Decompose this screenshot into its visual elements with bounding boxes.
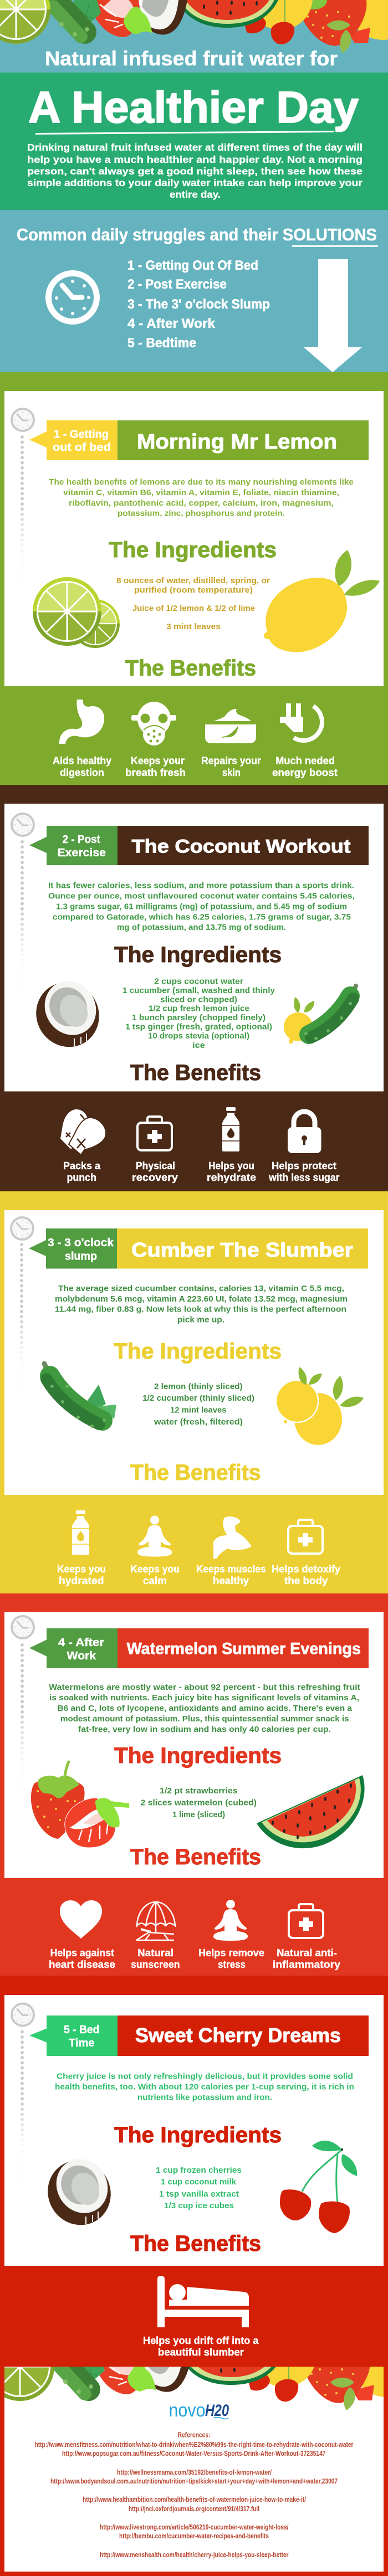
- icon: cherries: [280, 2141, 357, 2233]
- ingredient list: 1 lime (sliced): [172, 1810, 225, 1819]
- banner tab: [29, 1628, 118, 1668]
- description paragraph: fat-free, very low in sodium and has only 40 calories per cup.: [78, 1725, 331, 1734]
- panel: references card: [4, 2367, 384, 2572]
- intro paragraph: entire day.: [170, 189, 221, 200]
- list of struggles: [127, 258, 270, 351]
- logo: novoH20: novo: [169, 2400, 205, 2421]
- intro paragraph: Drinking natural fruit infused water at different times of the day will: [27, 142, 363, 153]
- ingredient list: 1 cup coconut milk: [161, 2177, 237, 2187]
- description paragraph: mg of potassium, and 13.75 mg of sodium.: [117, 923, 286, 932]
- panel: section 3 white card: [4, 1210, 384, 1495]
- description paragraph: [49, 1683, 360, 1734]
- description paragraph: The average sized cucumber contains, calories 13, vitamin C 5.5 mcg,: [58, 1284, 344, 1293]
- panel: section 2 white card: [4, 804, 384, 1091]
- description paragraph: modest amount of potassium. Plus, this quintessential summer snack is: [60, 1714, 349, 1724]
- ingredient list: purified (room temperature): [134, 585, 253, 595]
- benefit labels: inflammatory: [273, 1959, 340, 1970]
- ingredient list: [142, 1382, 254, 1427]
- top fruit banner: [0, 0, 388, 53]
- benefit labels: Packs a: [63, 1160, 101, 1171]
- timeline dots: [21, 1643, 24, 1796]
- description paragraph: compared to Gatorade, which has 6.25 calories, 1.75 grams of sugar, 3.75: [53, 912, 351, 922]
- heading: common daily struggles: Common daily struggles and their SOLUTIONS: [17, 225, 377, 244]
- benefit labels: digestion: [60, 767, 104, 778]
- logo: novoH20: H20: [205, 2402, 229, 2420]
- description paragraph: [55, 2072, 354, 2102]
- description paragraph: 1.3 grams sugar, 61 milligrams (mg) of potassium, and 5.45 mg of sodium: [56, 902, 347, 911]
- icon: first aid kit: [137, 1117, 172, 1150]
- benefit labels: Helps protect: [272, 1160, 336, 1171]
- ingredient list: 1/3 cup ice cubes: [164, 2201, 234, 2210]
- heading: ingredients: The Ingredients: [114, 1339, 282, 1364]
- references list: http://jnci.oxfordjournals.org/content/91/4/317.full: [129, 2505, 259, 2513]
- benefit labels: [53, 755, 338, 778]
- description paragraph: 11.44 mg, fiber 0.83 g. Now lets look at why this is the perfect afternoon: [55, 1305, 346, 1314]
- icon: timeline clock: [12, 1616, 34, 1638]
- banner tab: [29, 1228, 117, 1268]
- description paragraph: Cherry juice is not only refreshingly delicious, but it provides some solid: [57, 2072, 353, 2081]
- banner tab: slump: [65, 1250, 97, 1263]
- banner tab: out of bed: [53, 441, 111, 454]
- benefit labels: calm: [143, 1575, 167, 1586]
- icon: lemon and cucumber: [284, 986, 356, 1043]
- references list: http://www.healthambition.com/health-benefits-of-watermelon-juice-how-to-make-it/: [83, 2496, 306, 2503]
- heading: ingredients: The Ingredients: [114, 2123, 282, 2147]
- benefit labels: Much neded: [275, 755, 335, 767]
- description paragraph: [55, 1284, 348, 1325]
- benefit labels: heart disease: [49, 1959, 115, 1970]
- banner tab: Work: [67, 1649, 96, 1662]
- ingredient list: 1/2 cucumber (thinly sliced): [142, 1394, 254, 1403]
- benefit labels: sunscreen: [131, 1959, 180, 1970]
- ingredient list: 2 slices watermelon (cubed): [141, 1798, 257, 1808]
- benefit labels: Helps against: [50, 1947, 114, 1958]
- banner tab: 1 - Getting: [54, 428, 109, 441]
- banner tab: [29, 826, 118, 865]
- description paragraph: [49, 477, 354, 518]
- ingredient list: Juice of 1/2 lemon & 1/2 of lime: [132, 604, 255, 613]
- ingredient list: 2 lemon (thinly sliced): [154, 1382, 243, 1391]
- panel: green title band: [0, 73, 388, 210]
- icon: water bottle: [72, 1510, 89, 1555]
- ingredient list: 1 bunch parsley (chopped finely): [132, 1013, 266, 1022]
- benefit labels: the body: [284, 1575, 328, 1586]
- banner title: Cumber The Slumber: [131, 1238, 353, 1261]
- ingredient list: water (fresh, filtered): [154, 1417, 243, 1427]
- panel: section 5 white card: [4, 1995, 384, 2266]
- description paragraph: health benefits, too. With about 120 calories per 1-cup serving, it is rich in: [55, 2083, 354, 2091]
- ingredient list: 2 cups coconut water: [154, 977, 243, 986]
- benefit labels: skin: [222, 767, 241, 778]
- heading: benefits: The Benefits: [130, 1061, 261, 1085]
- heading: benefits: The Benefits: [125, 656, 256, 680]
- intro paragraph: [27, 142, 363, 200]
- list of struggles: 1 - Getting Out Of Bed: [127, 258, 258, 273]
- intro paragraph: simple additions to your daily water intake can help improve your: [27, 177, 363, 188]
- icon: first aid kit: [288, 1520, 323, 1554]
- main title: A Healthier Day: [28, 83, 359, 132]
- benefit labels: recovery: [132, 1172, 178, 1183]
- description paragraph: [48, 881, 355, 932]
- heading: benefits: The Benefits: [130, 1461, 261, 1485]
- description paragraph: Ounce per ounce, most unflavoured coconut water contains 5.45 calories,: [48, 892, 355, 901]
- list of struggles: 5 - Bedtime: [127, 336, 196, 351]
- banner tab: 3 - 3 o'clock: [48, 1236, 114, 1249]
- panel: section 1 white card: [4, 391, 384, 686]
- icon: timeline clock: [12, 814, 34, 836]
- icon: power plug: [280, 703, 322, 741]
- benefits row: section 4: [49, 1900, 340, 1970]
- references list: http://www.livestrong.com/article/506219-cucumber-water-weight-loss/: [100, 2523, 289, 2531]
- ingredient list: [116, 576, 270, 631]
- timeline dots: [21, 2030, 24, 2183]
- benefit label: [143, 2335, 259, 2358]
- benefit labels: Repairs your: [201, 755, 261, 767]
- icon: cucumber and mint: [44, 1364, 116, 1428]
- icon: timeline clock: [11, 1217, 33, 1240]
- description paragraph: vitamin C, vitamin B6, vitamin A, vitamin E, foliate, niacin thiamine,: [63, 488, 339, 497]
- icon: water bottle: [222, 1107, 239, 1151]
- description paragraph: riboflavin, pantothenic acid, copper, calcium, iron, magnesium,: [69, 498, 334, 508]
- description paragraph: potassium, zinc, phosphorus and protein.: [118, 508, 285, 518]
- description paragraph: molybdenum 5.6 mcg, vitamin A 223.60 UI, folate 13.52 mcg, magnesium: [55, 1294, 348, 1304]
- heading: ingredients: The Ingredients: [114, 1744, 282, 1768]
- banner tab: 2 - Post: [62, 833, 100, 846]
- banner title: Morning Mr Lemon: [137, 430, 337, 454]
- icon: timeline clock: [12, 409, 34, 431]
- ingredient list: [156, 2166, 242, 2210]
- description paragraph: The health benefits of lemons are due to its many nourishing elements like: [49, 477, 354, 487]
- benefit labels: Keeps your: [131, 755, 185, 767]
- icon: timeline clock: [12, 2004, 34, 2026]
- icon: skin cream: [205, 709, 256, 743]
- icon: coconut: [36, 2149, 122, 2236]
- references list: [34, 2431, 354, 2559]
- icon: meditating figure: [213, 1900, 248, 1941]
- icon: coconut: [24, 971, 111, 1058]
- icon: beach umbrella: [136, 1902, 175, 1940]
- benefit labels: Helps remove: [198, 1947, 264, 1958]
- benefit labels: Natural: [137, 1947, 173, 1958]
- banner tab: [29, 2015, 118, 2056]
- benefits row: section 5: [143, 2276, 259, 2358]
- banner title: [118, 1628, 369, 1668]
- banner title: [117, 1228, 368, 1268]
- description paragraph: nutrients like potassium and iron.: [137, 2092, 272, 2102]
- list of struggles: 3 - The 3' o'clock Slump: [127, 297, 270, 312]
- icon: lime slices: [33, 577, 120, 648]
- heading: benefits: The Benefits: [130, 1845, 261, 1869]
- benefit labels: Keeps muscles: [196, 1564, 266, 1575]
- ingredient list: 1/2 pt strawberries: [160, 1786, 238, 1796]
- icon: meditating figure: [137, 1515, 172, 1556]
- description paragraph: It has fewer calories, less sodium, and more potassium than a sports drink.: [48, 881, 354, 891]
- benefit labels: with less sugar: [268, 1172, 339, 1183]
- ingredient list: 1 tsp vanilla extract: [159, 2189, 239, 2199]
- benefit label: beautiful slumber: [158, 2347, 244, 2358]
- banner tab: 5 - Bed: [64, 2023, 100, 2036]
- benefit labels: energy boost: [272, 767, 338, 778]
- title line: Natural infused fruit water for: Natural infused fruit water for: [45, 47, 338, 70]
- references list: http://bembu.com/cucumber-water-recipes-and-benefits: [119, 2532, 269, 2540]
- ingredient list: 3 mint leaves: [166, 622, 221, 631]
- description paragraph: B6 and C, lots of lycopene, antioxidants and amino acids. There's even a: [58, 1704, 353, 1713]
- benefit labels: breath fresh: [125, 767, 186, 778]
- banner title: [118, 2015, 369, 2056]
- icon: strawberries: [31, 1762, 129, 1848]
- benefit labels: [49, 1947, 340, 1970]
- ingredient list: 12 mint leaves: [170, 1405, 226, 1415]
- ingredient list: 8 ounces of water, distilled, spring, or: [116, 576, 270, 585]
- ingredient list: [141, 1786, 257, 1819]
- benefit labels: punch: [67, 1172, 96, 1183]
- ingredient list: 1 cucumber (small, washed and thinly: [122, 986, 275, 995]
- benefit label: Helps you drift off into a: [143, 2335, 259, 2346]
- references list: http://www.popsugar.com.au/fitness/Coconut-Water-Versus-Sports-Drink-After-Workout-37235147: [62, 2450, 326, 2457]
- benefit labels: Physical: [136, 1160, 175, 1171]
- ingredient list: sliced or chopped): [160, 995, 237, 1005]
- benefit labels: Keeps you: [130, 1564, 180, 1575]
- banner title: Watermelon Summer Evenings: [127, 1640, 361, 1658]
- benefit labels: Natural anti-: [277, 1947, 337, 1958]
- arrow: down: [304, 259, 362, 372]
- benefit labels: Helps you: [208, 1160, 254, 1171]
- benefit labels: stress: [218, 1959, 246, 1970]
- list of struggles: 4 - After Work: [127, 316, 215, 331]
- icon: stomach: [59, 700, 104, 744]
- ingredient list: ice: [192, 1041, 205, 1050]
- banner title: Sweet Cherry Dreams: [135, 2024, 341, 2047]
- banner tab: 4 - After: [58, 1636, 104, 1649]
- bottom fruit banner: [4, 2367, 384, 2410]
- benefits row: section 3: [57, 1510, 340, 1586]
- icon: first aid kit: [289, 1904, 323, 1938]
- references list: http://www.menshealth.com/health/cherry-juice-helps-you-sleep-better: [100, 2551, 289, 2559]
- references list: http://wellnessmama.com/35192/benefits-of-lemon-water/: [117, 2469, 272, 2476]
- timeline dots: [21, 435, 24, 588]
- banner title: [118, 826, 369, 865]
- benefits row: section 1: [53, 700, 338, 778]
- icon: heart: [60, 1900, 102, 1939]
- benefit labels: healthy: [213, 1575, 249, 1586]
- timeline dots: [21, 840, 24, 993]
- intro paragraph: person, can't always get a good night sleep, then see how these: [27, 166, 363, 177]
- benefit labels: rehydrate: [207, 1172, 256, 1183]
- references list: References:: [177, 2431, 211, 2439]
- banner tab: [29, 420, 118, 460]
- ingredient list: 1 cup frozen cherries: [156, 2166, 242, 2175]
- icon: boxing gloves: [60, 1109, 106, 1155]
- heading: ingredients: The Ingredients: [109, 538, 277, 562]
- benefit labels: Helps detoxify: [272, 1564, 340, 1575]
- logo: novoH20: [169, 2400, 229, 2421]
- ingredient list: 1 tsp ginger (fresh, grated, optional): [125, 1022, 272, 1032]
- icon: bed: [157, 2276, 249, 2327]
- icon: gas mask: [131, 702, 176, 745]
- icon: lemons: [276, 1367, 364, 1445]
- description paragraph: pick me up.: [177, 1315, 224, 1325]
- banner title: [118, 420, 369, 460]
- icon: padlock: [288, 1112, 321, 1153]
- heading: benefits: The Benefits: [130, 2231, 261, 2256]
- benefits row: section 2: [60, 1107, 339, 1183]
- banner tab: Time: [69, 2037, 94, 2049]
- icon: clock: [49, 274, 96, 321]
- benefit labels: Aids healthy: [53, 755, 111, 767]
- banner title: The Coconut Workout: [132, 836, 350, 857]
- ingredient list: 1/2 cup fresh lemon juice: [149, 1004, 249, 1014]
- banner tab: Exercise: [58, 846, 106, 859]
- timeline dots: [20, 1243, 23, 1396]
- icon: flexed arm: [213, 1516, 252, 1559]
- panel: section 4 white card: [4, 1612, 384, 1878]
- ingredient list: 10 drops stevia (optional): [148, 1031, 249, 1041]
- benefit labels: [57, 1564, 340, 1586]
- description paragraph: Watermelons are mostly water - about 92 percent - but this refreshing fruit: [49, 1683, 360, 1692]
- benefit labels: Keeps you: [57, 1564, 106, 1575]
- heading: ingredients: The Ingredients: [114, 943, 282, 967]
- title underline: [35, 131, 334, 135]
- benefit labels: [63, 1160, 339, 1183]
- intro paragraph: help you have a much healthier and happier day. Not a morning: [27, 154, 363, 165]
- description paragraph: is soaked with nutrients. Each juicy bite has significant levels of vitamins A,: [49, 1693, 359, 1703]
- ingredient list: [122, 977, 275, 1050]
- icon: lemon: [264, 550, 380, 652]
- benefit labels: hydrated: [59, 1575, 104, 1586]
- icon: watermelon: [257, 1775, 365, 1848]
- list of struggles: 2 - Post Exercise: [127, 277, 227, 292]
